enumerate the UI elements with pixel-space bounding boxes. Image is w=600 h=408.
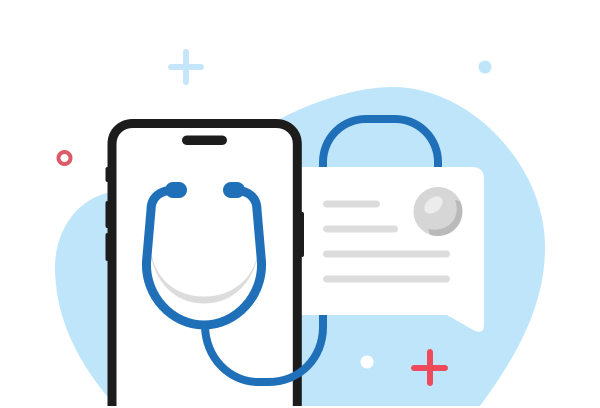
phone speaker notch — [182, 136, 227, 145]
lower tube — [205, 315, 323, 382]
phone — [106, 124, 304, 406]
stethoscope — [146, 182, 323, 382]
chest piece highlight — [421, 193, 446, 217]
right earpiece — [223, 182, 245, 198]
icon: red ring — [58, 152, 70, 164]
text line 3 — [323, 250, 450, 258]
background blob: right — [260, 87, 545, 406]
chest piece shadow — [428, 200, 462, 236]
icon: white dot — [360, 356, 374, 368]
side buttons — [106, 167, 304, 261]
phone body — [112, 124, 297, 406]
left earpiece — [165, 182, 187, 198]
headset tube — [146, 190, 262, 325]
stethoscope upper tube — [323, 119, 438, 190]
text line 1 — [323, 200, 380, 208]
icon: light blue plus — [171, 52, 201, 82]
icon: red plus — [414, 352, 445, 383]
background blob: left — [55, 192, 112, 402]
icon: light blue dot — [478, 60, 492, 74]
stethoscope chest piece — [414, 187, 462, 236]
text line 2 — [323, 226, 398, 232]
text line 4 — [323, 276, 450, 282]
grey back of headset — [151, 255, 258, 303]
chat bubble card — [290, 167, 484, 332]
